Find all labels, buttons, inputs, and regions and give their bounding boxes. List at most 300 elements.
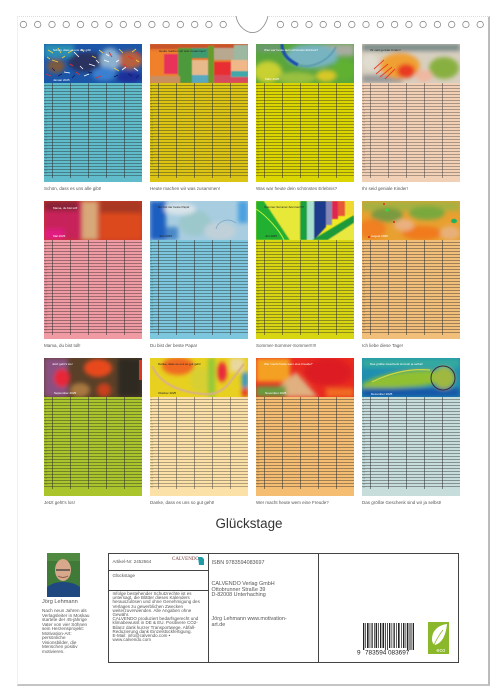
- table: February: 13: [151, 119, 153, 121]
- painting: teal waves: Das größte Geschenk sind wir ja selbst!: [370, 362, 423, 366]
- table: July: 25: [257, 312, 259, 314]
- table: February: 15: [151, 125, 153, 127]
- table: May: 28: [45, 321, 47, 323]
- table: July: 22: [257, 303, 259, 305]
- table: September: 17: [45, 445, 47, 447]
- table: August: 5: [363, 252, 364, 254]
- table: December: 29: [363, 481, 365, 483]
- table: June: 16: [151, 285, 153, 287]
- table: December: [362, 397, 460, 496]
- table: August: 31: [363, 330, 365, 332]
- table: November: [256, 397, 354, 496]
- panel: October: [150, 358, 248, 505]
- panel: March: [256, 44, 354, 191]
- table: June: 6: [151, 255, 152, 257]
- legal text: klimabewusst in DE & EU. Positivere CO2-: [112, 620, 198, 625]
- painting: colored patches: Heute machen wir was zusammen!: [159, 49, 206, 53]
- painting: light blue: [150, 201, 248, 240]
- table: August: 17: [363, 288, 365, 290]
- table: March: 31: [257, 173, 259, 175]
- publisher address: Ottobrunner Straße 39: [212, 587, 265, 593]
- table: June: 23: [151, 306, 153, 308]
- legal text: [112, 591, 200, 642]
- table: April: 16: [363, 128, 365, 130]
- author biography: Nach neun Jahren als: [42, 608, 87, 613]
- table: March: 23: [257, 149, 259, 151]
- table: September: 16: [45, 442, 47, 444]
- table: May: 31: [45, 330, 47, 332]
- painting: dark with red and purple: Jetzt geht's los!: [52, 362, 73, 366]
- table: May: 22: [45, 303, 47, 305]
- table: June: 21: [151, 300, 153, 302]
- table: January: 19: [45, 137, 47, 139]
- table: September: [44, 397, 142, 496]
- table: August: 26: [363, 315, 365, 317]
- table: April: 17: [363, 131, 365, 133]
- table: January: 4: [45, 92, 46, 94]
- table: May: 14: [45, 279, 47, 281]
- table: April: 12: [363, 116, 365, 118]
- table: March: 20: [257, 140, 259, 142]
- painting: orange burst: [362, 44, 460, 83]
- table: November: 17: [257, 445, 259, 447]
- table: January: 11: [45, 113, 47, 115]
- table: February: 21: [151, 143, 153, 145]
- table: August: 18: [363, 291, 365, 293]
- author website: art.de: [212, 622, 225, 628]
- table: January: 23: [45, 149, 47, 151]
- painting: light blue: Du bist der beste Papa!: [158, 205, 190, 209]
- table: December: 17: [363, 445, 365, 447]
- table: November: 19: [257, 451, 259, 453]
- table: March: 30: [257, 170, 259, 172]
- table: January: 18: [45, 134, 47, 136]
- table: September: 30: [45, 484, 47, 486]
- table: December: 8: [363, 418, 364, 420]
- panel: June: [150, 201, 248, 348]
- table: October: 14: [151, 436, 153, 438]
- table: May: 27: [45, 318, 47, 320]
- table: November: 25: [257, 469, 259, 471]
- table: January: 30: [45, 170, 47, 172]
- table: April: 24: [363, 152, 365, 154]
- table: September: 24: [45, 466, 47, 468]
- panel: September: [44, 358, 142, 505]
- legal text: Verlages zu gewerblichen Zwecken: [112, 604, 183, 609]
- table: June: 1: [151, 240, 152, 242]
- table: November: 2: [257, 400, 258, 402]
- table: September: 21: [45, 457, 47, 459]
- table: March: 10: [257, 110, 259, 112]
- table: December: 22: [363, 460, 365, 462]
- table: July: 19: [257, 294, 259, 296]
- table: June: 25: [151, 312, 153, 314]
- publisher address: [212, 581, 275, 598]
- table: March: [256, 83, 354, 182]
- table: October: 21: [151, 457, 153, 459]
- table: November: 13: [257, 433, 259, 435]
- table: October: 3: [151, 403, 152, 405]
- author biography: Verlagsleiter in Moskau: [42, 612, 90, 618]
- table: March: 3: [257, 89, 258, 91]
- table: February: 5: [151, 95, 152, 97]
- table: June: 5: [151, 252, 152, 254]
- table: December: 6: [363, 412, 364, 414]
- table: July: 30: [257, 327, 259, 329]
- table: September: 28: [45, 478, 47, 480]
- calendar title row: Glückstage: [112, 573, 135, 578]
- table: May: 8: [45, 261, 46, 263]
- table: May: 24: [45, 309, 47, 311]
- table: December: 3: [363, 403, 364, 405]
- panel: April: [362, 44, 460, 191]
- table: May: 2: [45, 243, 46, 245]
- table: August: 16: [363, 285, 365, 287]
- table: September: 19: [45, 451, 47, 453]
- table: January: 1: [45, 83, 46, 85]
- table: June: [150, 240, 248, 339]
- table: March: 7: [257, 101, 258, 103]
- table: July: 13: [257, 276, 259, 278]
- table: August: 12: [363, 273, 365, 275]
- table: October: 30: [151, 484, 153, 486]
- table: November: 30: [257, 484, 259, 486]
- icon: eco leaf badge: eco: [436, 648, 445, 654]
- table: July: 3: [257, 246, 258, 248]
- table: December: 13: [363, 433, 365, 435]
- table: July: 26: [257, 315, 259, 317]
- table: November: 8: [257, 418, 258, 420]
- caption: Heute machen wir was zusammen!: [150, 186, 220, 191]
- table: May: 18: [45, 291, 47, 293]
- legal text: Bilanz dank kurzer Transportwege. Abfall-: [112, 625, 196, 630]
- table: September: 26: [45, 472, 47, 474]
- table: September: 6: [45, 412, 46, 414]
- author biography: Visionsbilder, die: [42, 640, 76, 644]
- panel: November: [256, 358, 354, 505]
- table: December: 30: [363, 484, 365, 486]
- table: March: 15: [257, 125, 259, 127]
- table: November: 16: [257, 442, 259, 444]
- table: July: 12: [257, 273, 259, 275]
- table: August: 1: [363, 240, 364, 242]
- table: March: 6: [257, 98, 258, 100]
- table: April: 13: [363, 119, 365, 121]
- table: January: 16: [45, 128, 47, 130]
- table: January: 26: [45, 158, 47, 160]
- table: March: 8: [257, 104, 258, 106]
- table: September: 20: [45, 454, 47, 456]
- table: March: 17: [257, 131, 259, 133]
- table: August: 7: [363, 258, 364, 260]
- table: May: 9: [45, 264, 46, 266]
- table: November: 23: [257, 463, 259, 465]
- table: June: 24: [151, 309, 153, 311]
- table: July: 7: [257, 258, 258, 260]
- table: July: 29: [257, 324, 259, 326]
- table: November: 3: [257, 403, 258, 405]
- barcode: [357, 623, 414, 656]
- author block: [42, 553, 90, 654]
- publisher address: CALVENDO Verlag GmbH: [212, 581, 275, 587]
- table: July: 9: [257, 264, 258, 266]
- table: July: [256, 240, 354, 339]
- table: March: 2: [257, 86, 258, 88]
- table: July: 18: [257, 291, 259, 293]
- table: October: 8: [151, 418, 152, 420]
- table: May: 25: [45, 312, 47, 314]
- table: August: 9: [363, 264, 364, 266]
- table: July: 27: [257, 318, 259, 320]
- table: July: 1: [257, 240, 258, 242]
- table: February: 12: [151, 116, 153, 118]
- table: December: 2: [363, 400, 364, 402]
- table: February: 24: [151, 152, 153, 154]
- author website: [212, 616, 287, 628]
- author website: Jörg Lehmann www.motivation-: [212, 616, 287, 622]
- table: April: 2: [363, 86, 364, 88]
- table: August: 13: [363, 276, 365, 278]
- painting: teal waves: [362, 358, 460, 397]
- divider column: left: [109, 554, 209, 662]
- calendar title row: [109, 571, 208, 591]
- author biography: persönliche: [42, 635, 66, 640]
- table: August: 14: [363, 279, 365, 281]
- table: September: 8: [45, 418, 46, 420]
- painting: green and blue swirl: [256, 44, 354, 83]
- table: December: 15: [363, 439, 365, 441]
- table: April: 21: [363, 143, 365, 145]
- table: November: 28: [257, 478, 259, 480]
- table: July: 21: [257, 300, 259, 302]
- table: April: 28: [363, 164, 365, 166]
- table: February: 7: [151, 101, 152, 103]
- painting: orange burst: Ihr seid geniale Kinder!: [370, 48, 401, 52]
- painting: red and orange: November 2025: [265, 391, 287, 395]
- table: August: 28: [363, 321, 365, 323]
- table: July: 20: [257, 297, 259, 299]
- table: September: 12: [45, 430, 47, 432]
- table: June: 10: [151, 267, 153, 269]
- table: June: 2: [151, 243, 152, 245]
- table: May: 29: [45, 324, 47, 326]
- table: April: 5: [363, 95, 364, 97]
- table: December: 16: [363, 442, 365, 444]
- table: May: 10: [45, 267, 47, 269]
- table: August: 2: [363, 243, 364, 245]
- table: February: 6: [151, 98, 152, 100]
- painting: yellow with pink branch: [150, 358, 248, 397]
- table: July: 8: [257, 261, 258, 263]
- caption: Du bist der beste Papa!: [150, 343, 197, 348]
- table: August: 30: [363, 327, 365, 329]
- table: January: 25: [45, 155, 47, 157]
- author biography: Motivation-Art:: [42, 630, 72, 636]
- painting: yellow with pink branch: Oktober 2025: [158, 391, 177, 395]
- table: April: 22: [363, 146, 365, 148]
- table: July: 6: [257, 255, 258, 257]
- panel: May: [44, 201, 142, 348]
- table: January: 10: [45, 110, 47, 112]
- table: May: 15: [45, 282, 47, 284]
- title: Glückstage: [216, 516, 282, 531]
- painting: green, yellow, stripes: Sommer-Sommer-Sommer!!!!!: [264, 205, 304, 209]
- table: October: 22: [151, 460, 153, 462]
- legal text: Gewähr.: [112, 612, 129, 617]
- table: October: 6: [151, 412, 152, 414]
- table: February: 25: [151, 155, 153, 157]
- table: June: 19: [151, 294, 153, 296]
- table: December: 12: [363, 430, 365, 432]
- painting: blue abstract: [44, 44, 142, 83]
- table: March: 18: [257, 134, 259, 136]
- table: September: 27: [45, 475, 47, 477]
- table: May: 7: [45, 258, 46, 260]
- table: February: 2: [151, 86, 152, 88]
- table: December: 19: [363, 451, 365, 453]
- painting: red and orange: [256, 358, 354, 397]
- table: November: 22: [257, 460, 259, 462]
- table: July: 24: [257, 309, 259, 311]
- table: April: 8: [363, 104, 364, 106]
- table: May: 4: [45, 249, 46, 251]
- table: April: 3: [363, 89, 364, 91]
- table: March: 21: [257, 143, 259, 145]
- table: October: 13: [151, 433, 153, 435]
- table: December: 27: [363, 475, 365, 477]
- table: March: 25: [257, 155, 259, 157]
- table: November: 12: [257, 430, 259, 432]
- painting: colored patches: [150, 44, 248, 83]
- author biography: Vater von vier Söhnen: [42, 622, 87, 626]
- table: June: 17: [151, 288, 153, 290]
- table: November: 18: [257, 448, 259, 450]
- table: June: 30: [151, 327, 153, 329]
- table: April: 27: [363, 161, 365, 163]
- publisher address: D-82008 Unterhaching: [212, 592, 266, 598]
- table: December: 31: [363, 487, 365, 489]
- painting: orange and green: August 2025: [371, 234, 388, 238]
- table: April: [362, 83, 460, 182]
- painting: green, yellow, stripes: [256, 201, 354, 240]
- table: April: 29: [363, 167, 365, 169]
- table: May: 1: [45, 240, 46, 242]
- table: June: 28: [151, 321, 153, 323]
- caption: Mama, du bist toll!: [44, 343, 81, 348]
- table: December: 23: [363, 463, 365, 465]
- caption: Danke, dass es uns so gut geht!: [150, 500, 214, 505]
- table: August: 24: [363, 309, 365, 311]
- table: February: 11: [151, 113, 153, 115]
- table: January: 7: [45, 101, 46, 103]
- painting: red and pink: [44, 201, 142, 240]
- table: April: 14: [363, 122, 365, 124]
- painting: orange and green: [362, 201, 460, 240]
- table: October: 25: [151, 469, 153, 471]
- legal text: Reduzierung dank Einzelstückfertigung.: [112, 629, 192, 634]
- table: May: 12: [45, 273, 47, 275]
- table: July: 5: [257, 252, 258, 254]
- table: May: [44, 240, 142, 339]
- table: August: 27: [363, 318, 365, 320]
- table: April: 18: [363, 134, 365, 136]
- table: November: 20: [257, 454, 259, 456]
- author biography: startete der 45-jährige: [42, 617, 87, 622]
- table: May: 16: [45, 285, 47, 287]
- icon: eco leaf badge: [428, 622, 449, 654]
- painting: blue abstract: Januar 2025: [53, 78, 70, 82]
- table: May: 20: [45, 297, 47, 299]
- table: October: 23: [151, 463, 153, 465]
- table: August: 29: [363, 324, 365, 326]
- spiral binding holes: [20, 16, 484, 33]
- table: February: 8: [151, 104, 152, 106]
- table: April: 6: [363, 98, 364, 100]
- table: October: 18: [151, 448, 153, 450]
- painting: dark with red and purple: September 2025: [54, 391, 77, 395]
- panel: December: [362, 358, 460, 505]
- table: February: 16: [151, 128, 153, 130]
- table: November: 29: [257, 481, 259, 483]
- article number row: [109, 554, 208, 571]
- painting: yellow with pink branch: Danke, dass es uns so gut geht!: [158, 362, 201, 366]
- table: October: 29: [151, 481, 153, 483]
- table: March: 26: [257, 158, 259, 160]
- table: April: 1: [363, 83, 364, 85]
- column: publisher: [209, 554, 319, 662]
- legal text: Infolge bestehender Schutzrechte ist es: [112, 591, 192, 596]
- table: July: 15: [257, 282, 259, 284]
- table: October: 27: [151, 475, 153, 477]
- author biography: Menschen positiv: [42, 644, 78, 649]
- table: May: 11: [45, 270, 47, 272]
- table: November: 7: [257, 415, 258, 417]
- table: August: 11: [363, 270, 365, 272]
- table: December: 11: [363, 427, 365, 429]
- table: February: 10: [151, 110, 153, 112]
- table: December: 5: [363, 409, 364, 411]
- table: March: 4: [257, 92, 258, 94]
- table: February: 9: [151, 107, 152, 109]
- table: December: 18: [363, 448, 365, 450]
- table: July: 2: [257, 243, 258, 245]
- painting: red and pink: Mai 2025: [53, 234, 66, 238]
- table: March: 12: [257, 116, 259, 118]
- painting: red and pink: Mama, du bist toll!: [53, 206, 78, 210]
- table: September: 1: [45, 397, 46, 399]
- caption: Jetzt geht's los!: [44, 500, 75, 505]
- table: June: 15: [151, 282, 153, 284]
- painting: green and blue swirl: März 2025: [265, 77, 280, 81]
- panel: January: [44, 44, 142, 191]
- table: November: 5: [257, 409, 258, 411]
- table: January: 3: [45, 89, 46, 91]
- table: October: 4: [151, 406, 152, 408]
- legal text: herauszulösen und ohne Genehmigung des: [112, 599, 200, 604]
- table: February: 14: [151, 122, 153, 124]
- ISBN: ISBN 9783594083697: [212, 560, 265, 566]
- table: August: 21: [363, 300, 365, 302]
- table: August: 15: [363, 282, 365, 284]
- table: June: 20: [151, 297, 153, 299]
- table: February: 3: [151, 89, 152, 91]
- table: January: 24: [45, 152, 47, 154]
- table: January: 9: [45, 107, 46, 109]
- table: October: 28: [151, 478, 153, 480]
- table: April: 11: [363, 113, 365, 115]
- table: May: 30: [45, 327, 47, 329]
- table: November: 14: [257, 436, 259, 438]
